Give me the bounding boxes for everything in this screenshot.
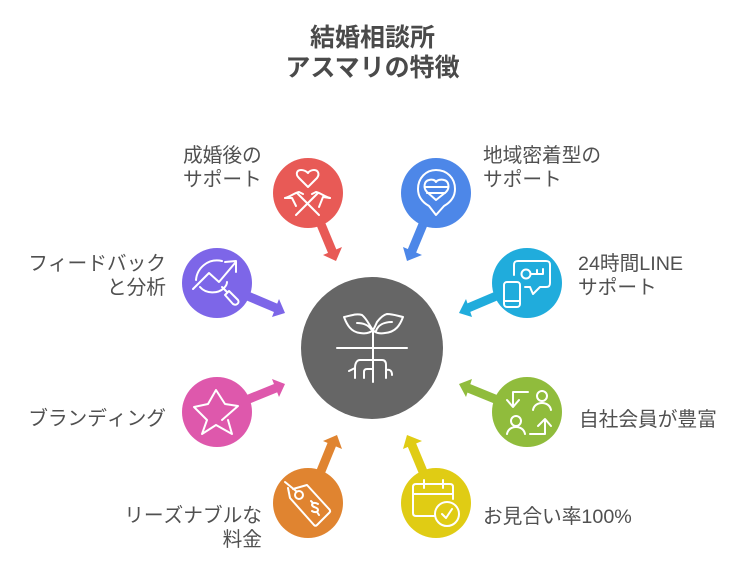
label: feedback and analysis: フィードバック	[28, 253, 166, 275]
icon: hands and heart	[285, 170, 330, 215]
arrow: feedback and analysis	[217, 283, 285, 317]
label: regional support: 地域密着型の	[483, 145, 601, 167]
arrow: meeting rate	[403, 435, 436, 503]
arrow: regional support	[403, 193, 436, 261]
title: アスマリの特徴	[285, 54, 460, 82]
label: reasonable price: リーズナブルな	[124, 504, 262, 527]
icon: heart map pin	[418, 170, 455, 215]
icon: price tag	[285, 482, 330, 526]
label: meeting rate: お見合い率100%	[483, 506, 632, 528]
node: post-marriage support	[273, 158, 343, 228]
label: in-house members: 自社会員が豊富	[579, 409, 717, 431]
label: regional support: サポート	[483, 169, 562, 191]
icon: magnifier with chart	[193, 260, 239, 305]
title	[285, 24, 460, 82]
label: feedback and analysis: と分析	[107, 277, 166, 299]
label: regional support	[483, 145, 601, 191]
arrow: branding	[217, 379, 285, 412]
node: feedback and analysis	[182, 248, 252, 318]
node: regional support	[401, 158, 471, 228]
icon: calendar with check	[413, 480, 459, 526]
icon: people exchange	[507, 391, 551, 434]
icon: phone and chat key	[504, 261, 550, 307]
label: 24-hour LINE support	[578, 253, 683, 299]
icon: star	[194, 390, 238, 434]
label: reasonable price	[124, 504, 262, 551]
label: 24-hour LINE support: 24時間LINE	[578, 253, 683, 275]
node: meeting rate	[401, 468, 471, 538]
label: branding: ブランディング	[28, 407, 166, 430]
label: post-marriage support	[183, 145, 262, 191]
center circle with sprout icon	[301, 277, 443, 419]
arrow: post-marriage support	[308, 193, 342, 261]
arrow: reasonable price	[308, 435, 342, 503]
node: 24-hour LINE support	[492, 248, 562, 318]
label: reasonable price: 料金	[223, 529, 262, 551]
node: reasonable price	[273, 468, 343, 538]
node: in-house members	[492, 377, 562, 447]
title: 結婚相談所	[310, 24, 435, 52]
label: 24-hour LINE support: サポート	[578, 277, 657, 299]
node: branding	[182, 377, 252, 447]
arrow: 24-hour LINE support	[459, 283, 527, 317]
label: post-marriage support: サポート	[183, 169, 262, 191]
label: feedback and analysis	[28, 253, 166, 299]
label: post-marriage support: 成婚後の	[183, 145, 262, 167]
arrow: in-house members	[459, 379, 527, 412]
